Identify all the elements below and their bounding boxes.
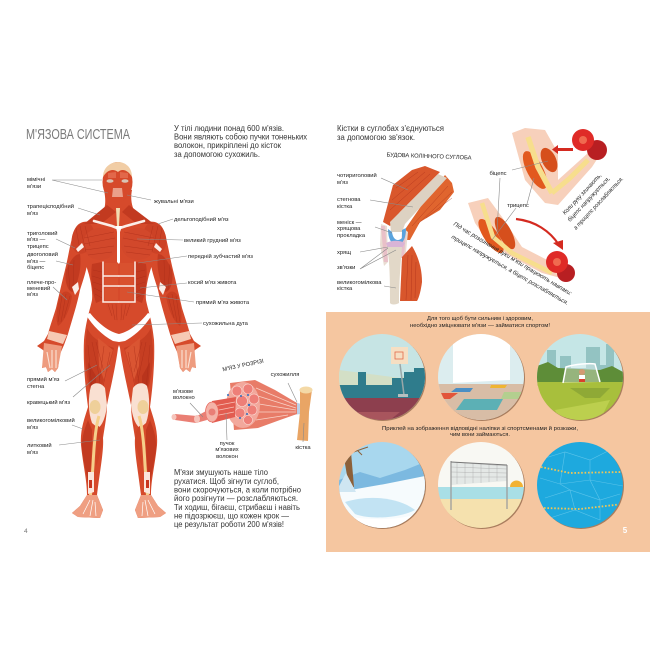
intro text block: Вони являють собою пучки тоненьких: [174, 132, 308, 142]
circle: beach volleyball: [438, 442, 525, 529]
body labels right: прямий м'яз живота: [196, 299, 250, 306]
body labels left: м'яз —: [27, 237, 45, 243]
intro text block: волокон, прикріплені до кісток: [174, 140, 281, 150]
body labels right: косий м'яз живота: [188, 279, 237, 286]
arrow: bending: [552, 145, 573, 154]
leader lines for body labels: [52, 180, 202, 445]
cross-section labels: сухожилля: [271, 372, 299, 378]
human muscular body figure: [37, 162, 201, 518]
body labels left: трицепс: [27, 244, 49, 250]
arm labels: [489, 171, 529, 209]
leader lines for cross-section: [190, 383, 304, 442]
rotated caption: bent arm: біцепс напружується,: [567, 176, 612, 223]
body labels right: сухожильна дуга: [203, 321, 249, 327]
body labels left: мімічні: [27, 177, 45, 183]
body labels left: м'яз —: [27, 259, 45, 265]
lower text block: Ти ходиш, бігаєш, стрибаєш і навіть: [174, 502, 300, 512]
body labels left: м'язи: [27, 184, 41, 190]
panel instruction text: [382, 425, 578, 438]
body labels left: плече-про-: [27, 280, 56, 286]
rotated caption: bent arm: а трицепс розслабляється.: [573, 176, 625, 231]
cross-section labels: [173, 372, 311, 460]
knee labels: зв'язки: [337, 265, 355, 271]
knee labels: чотириголовий: [337, 172, 377, 179]
lower text block: не підозрюєш, що кожен крок —: [174, 510, 289, 520]
panel instruction text: Приклей на зображення відповідні наліпки зі спортсменами й розкажи,: [382, 425, 578, 432]
intro text block: У тілі людини понад 600 м'язів.: [174, 123, 284, 133]
cross-section labels: м'язових: [215, 447, 239, 453]
muscle cross-section title: М'ЯЗ У РОЗРІЗІ: [222, 359, 265, 373]
body labels left: кравецький м'яз: [27, 399, 70, 406]
body labels right: передній зубчастий м'яз: [188, 253, 253, 260]
page number 4: 4: [24, 528, 28, 535]
knee labels: великогомілкова: [337, 280, 382, 286]
body labels right: великий грудний м'яз: [184, 237, 241, 244]
rotated caption: straight arm: трицепс напружується, а біцепс розслабляється.: [450, 235, 569, 307]
cross-section labels: волокон: [216, 454, 238, 460]
body labels left: триголовий: [27, 230, 57, 237]
rotated caption: straight arm: Під час розгинання руки м'язи працюють навпаки:: [452, 222, 573, 297]
lower text block: це результат роботи 200 м'язів!: [174, 519, 284, 529]
knee labels: стегнова: [337, 197, 361, 203]
joints text: Кістки в суглобах з'єднуються: [337, 123, 444, 133]
arm labels: трицепс: [507, 203, 529, 209]
knee labels: м'яз: [337, 180, 348, 186]
knee joint diagram: [380, 166, 454, 304]
panel instruction text: чим вони займаються.: [450, 431, 510, 438]
body labels left: м'яз: [27, 211, 38, 217]
muscle cross-section diagram: [172, 380, 312, 441]
straight arm illustration: [468, 198, 575, 282]
body labels left: м'яз: [27, 450, 38, 456]
page number 5: 5: [623, 526, 628, 535]
knee labels: кістка: [337, 204, 353, 210]
intro text block: за допомогою сухожиль.: [174, 149, 260, 159]
body labels left: великогомілковий: [27, 417, 75, 424]
rotated caption: bent arm: Коли руку згинають,: [562, 173, 603, 216]
lower text block: вони скорочуються, а коли потрібно: [174, 484, 301, 494]
title: М'ЯЗОВА СИСТЕМА: [26, 126, 130, 143]
panel heading: [410, 316, 550, 329]
bent arm illustration: [512, 128, 607, 205]
knee labels: прокладка: [337, 233, 366, 239]
body labels left: [27, 177, 75, 456]
lower text block: його розігнути — розслабляються.: [174, 493, 298, 503]
circle: gym: [438, 333, 525, 421]
body labels right: [154, 199, 253, 327]
body labels left: м'яз: [27, 425, 38, 431]
body labels left: литковий: [27, 442, 52, 449]
circle: football field: [537, 334, 624, 422]
cross-section labels: волокно: [173, 395, 195, 401]
circle: swimming pool: [537, 442, 624, 529]
body labels right: дельтоподібний м'яз: [174, 216, 229, 223]
body labels right: жувальні м'язи: [154, 199, 194, 205]
knee leader lines: [360, 178, 413, 288]
knee labels: [337, 172, 382, 292]
panel: sports: [326, 312, 650, 552]
arm leader lines: [492, 161, 548, 240]
knee labels: меніск —: [337, 220, 362, 226]
knee labels: кістка: [337, 286, 353, 292]
circle: winter: [336, 442, 426, 529]
cross-section labels: м'язове: [173, 389, 193, 395]
circle: basketball court: [339, 334, 426, 422]
body labels left: стегна: [27, 384, 45, 390]
body labels left: трапецієподібний: [27, 203, 74, 210]
lower text block: М'язи змушують наше тіло: [174, 467, 268, 477]
knee labels: хрящова: [337, 226, 361, 232]
arm labels: біцепс: [489, 171, 507, 177]
panel heading: Для того щоб бути сильним і здоровим,: [427, 316, 533, 322]
body labels left: біцепс: [27, 265, 44, 271]
arrow: straightening: [516, 219, 559, 245]
joints text: за допомогою зв'язок.: [337, 132, 415, 142]
knee title: БУДОВА КОЛІННОГО СУГЛОБА: [386, 153, 472, 161]
body labels left: меневий: [27, 285, 50, 292]
knee labels: хрящ: [337, 250, 351, 256]
cross-section labels: пучок: [220, 441, 235, 447]
panel heading: необхідно зміцнювати м'язи — займатися спортом!: [410, 322, 550, 329]
cross-section labels: кістка: [295, 445, 311, 451]
arrow head: [553, 240, 563, 250]
body labels left: прямий м'яз: [27, 376, 60, 383]
body labels left: двоголовий: [27, 251, 58, 258]
body labels left: м'яз: [27, 292, 38, 298]
lower text block: рухатися. Щоб зігнути суглоб,: [174, 476, 279, 486]
